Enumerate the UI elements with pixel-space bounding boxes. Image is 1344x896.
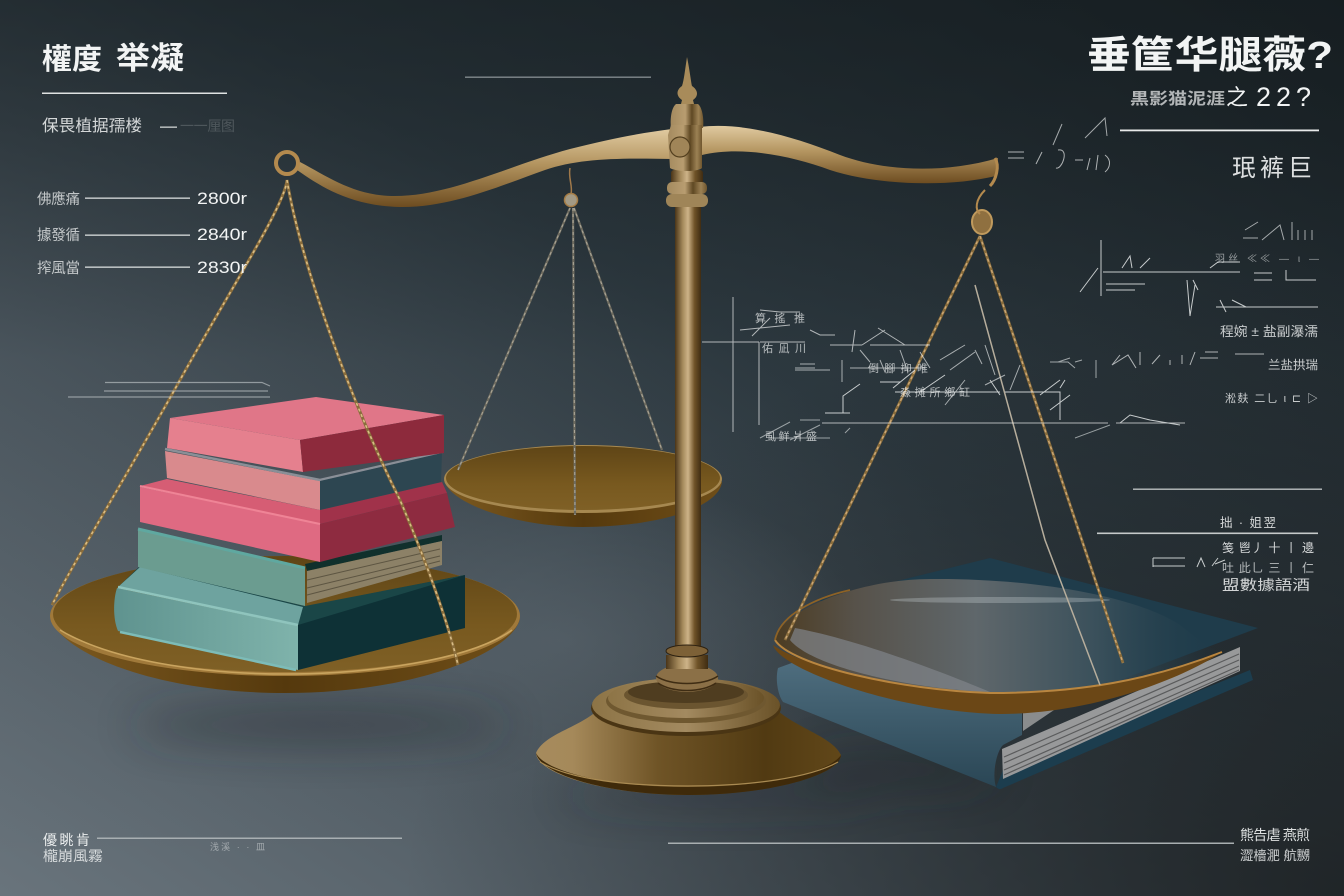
book 4: teal with cream pages [138, 529, 442, 606]
right side small notes: 程婉 ± 盐副瀑濡 [1220, 324, 1318, 339]
right side small notes: 兰盐拱瑞 [1268, 358, 1318, 372]
bottom right note: 熊告虐 燕煎 [1240, 827, 1310, 843]
scale post [666, 170, 708, 650]
data row 1 [37, 189, 247, 208]
scale hub and finial [668, 57, 703, 171]
right lower notes: 笺 鬯丿 十 丨 邊 [1222, 540, 1314, 555]
centre sketch labels [755, 311, 970, 443]
right pan chains [785, 190, 1123, 685]
left pan chains [52, 180, 458, 665]
left top title and rows: 举凝 [116, 41, 184, 76]
centre sketch labels: 淼摊所鄉缸 [900, 385, 970, 399]
right lower notes [1097, 488, 1322, 593]
centre sketch labels: 倒腳抑唯 [868, 361, 928, 375]
right lower notes: 拙 · 姐翌 [1220, 516, 1276, 530]
data row 1: 2800r [197, 189, 247, 208]
data row 3: 搾風當 [37, 259, 80, 277]
right title block [1087, 35, 1333, 182]
handwritten formula notes [702, 118, 1318, 567]
bottom right note [668, 827, 1310, 863]
left top title and rows: 一一厘图 [180, 118, 235, 134]
right side small notes: 羽丝 ≪≪ ― ι ― [1215, 253, 1319, 265]
scale base [536, 645, 841, 795]
top centre rule [465, 76, 651, 78]
bottom left note: 浅溪 · · 皿 [210, 841, 265, 852]
left subheading: 保畏植据孺楼 [42, 117, 142, 135]
book 3: pink [140, 479, 455, 562]
centre sketch labels: 佑凪川 [762, 341, 806, 355]
left heading: 權度 [42, 43, 102, 76]
book 2: pale pink and slate [165, 449, 442, 510]
data row 2: 據發循 [37, 227, 80, 244]
right heading: 垂筐华腿薇? [1087, 35, 1333, 77]
stack of books [114, 397, 465, 670]
bottom right note: 澀檣淝 航嬲 [1240, 848, 1310, 863]
bottom left note: 櫳崩風霧 [43, 848, 103, 864]
left mid rules [68, 382, 270, 397]
right book [777, 558, 1258, 789]
data row 1: 佛應痛 [37, 190, 80, 208]
shadows under objects [130, 707, 1000, 805]
left top title and rows [37, 41, 247, 277]
book 5: large teal [114, 566, 465, 670]
centre sketch labels: 算搖推 [755, 311, 805, 325]
right side small notes: 淞麸 二乚 ι ⊏ ▷ [1225, 392, 1318, 405]
right lower notes: 吐 此乚 三 丨 仁 [1222, 561, 1314, 575]
data row 3: 2830r [197, 258, 247, 277]
data row 2 [37, 225, 247, 244]
centre sketch labels: 虱鲜爿盛 [765, 429, 817, 443]
right title block: 之 [1226, 85, 1248, 110]
right pan [773, 579, 1222, 714]
bottom left note: 優眺肯 [43, 832, 90, 848]
book 1: top pink [167, 397, 444, 472]
scale beam [276, 126, 998, 207]
bottom left note [43, 832, 402, 864]
data row 3 [37, 258, 247, 277]
right title block: 22? [1256, 82, 1314, 112]
right subheading: 黒影猫泥涯 [1130, 90, 1225, 108]
left pan [50, 556, 520, 693]
right side small notes [1215, 253, 1319, 405]
right lower notes: 盟數據語酒 [1222, 577, 1310, 593]
middle small pan with chains [444, 168, 722, 527]
right caption: 珉裤巨 [1232, 155, 1312, 182]
data row 2: 2840r [197, 225, 247, 244]
